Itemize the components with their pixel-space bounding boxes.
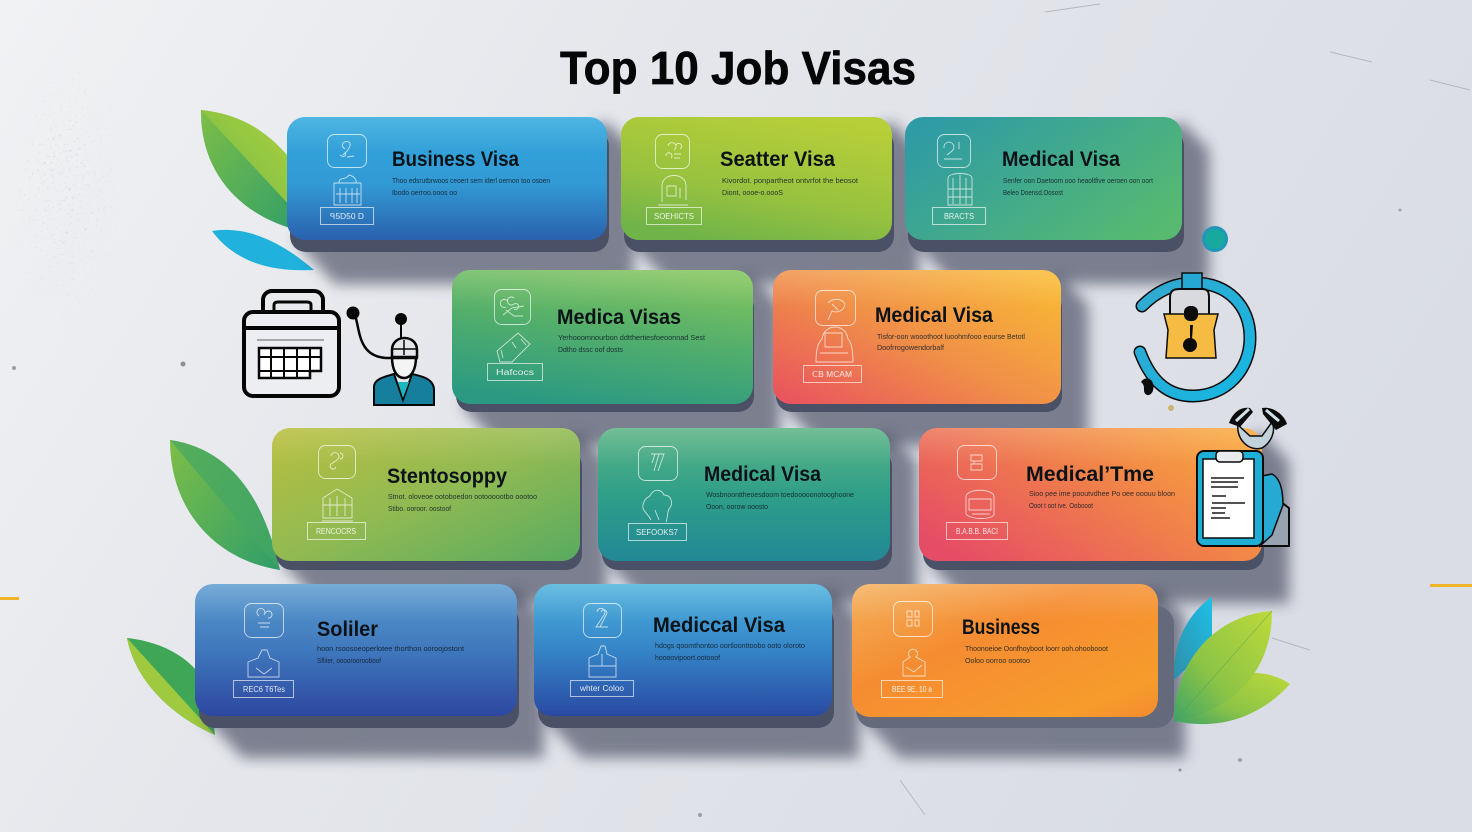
heading: Mediccal Visa bbox=[653, 614, 785, 637]
description bbox=[877, 332, 1025, 352]
heading: Medical’Tme bbox=[1026, 463, 1154, 486]
description: Doofrrogowendorbalf bbox=[877, 343, 945, 352]
icon building bbox=[322, 489, 353, 521]
card 5: Medical Visa bbox=[773, 270, 1088, 446]
description bbox=[1029, 489, 1175, 510]
label box bbox=[628, 524, 686, 540]
label box bbox=[646, 208, 702, 224]
description: Yerhooomnourbon ddtthertiesfoeoonnad Sest bbox=[558, 333, 706, 342]
label box: ᑕB MCAM bbox=[812, 370, 852, 379]
heading: Medical Visa bbox=[875, 304, 993, 327]
title: Top 10 Job Visas bbox=[560, 42, 916, 94]
description bbox=[392, 176, 550, 197]
description bbox=[317, 644, 465, 665]
icon person bbox=[248, 650, 279, 677]
label box bbox=[882, 680, 942, 698]
label box: SEFOOKS7 bbox=[636, 528, 679, 537]
icon tile bbox=[244, 604, 284, 638]
description: hdogs qoomthontoo oortloonttoobo ooto oloroto bbox=[655, 641, 805, 650]
card 8: Medical Time bbox=[919, 428, 1289, 603]
description: Ooloo oorroo oootoo bbox=[965, 656, 1030, 665]
description: Beleo Doensd.Oosost bbox=[1003, 188, 1064, 197]
card 2: Seatter Visa bbox=[621, 117, 919, 284]
illustration: calendar briefcase bbox=[244, 291, 339, 396]
label box: BRACTS bbox=[944, 212, 974, 221]
heading: Stentosoppy bbox=[387, 465, 507, 488]
description: Thoonoeioe Oonfhoyboot loorr ooh.ohoobooot bbox=[965, 644, 1109, 653]
description: Kivordot. ponpartheot ontvrfot the beosot bbox=[722, 176, 859, 185]
leaf: top left green bbox=[201, 110, 305, 232]
icon tile bbox=[894, 602, 932, 636]
leaf: third row left bbox=[170, 440, 280, 570]
icon tile bbox=[318, 446, 356, 478]
description: hoooovipoort.ootooof bbox=[655, 653, 721, 662]
card 4: Medica Visas bbox=[452, 270, 780, 446]
icon tile bbox=[958, 446, 996, 480]
card 1: Business Visa bbox=[287, 117, 634, 284]
teal dot bbox=[1202, 226, 1228, 252]
icon cloud bbox=[643, 490, 671, 522]
label box: BEE 9E. 10 a bbox=[892, 685, 932, 694]
card 7: Medical Visa bbox=[598, 428, 917, 603]
label box: B.A.B.B. BACI bbox=[956, 527, 998, 536]
description: Ooon, oorow ooosto bbox=[706, 502, 768, 511]
label box bbox=[932, 208, 986, 224]
card 11: Business bbox=[852, 584, 1185, 758]
label box bbox=[488, 364, 542, 380]
icon person bbox=[903, 649, 925, 676]
label box: ᑫ5D50 D bbox=[330, 212, 364, 221]
icon tile bbox=[638, 446, 678, 480]
accent dash right bbox=[1430, 584, 1472, 587]
description bbox=[655, 641, 805, 662]
label box bbox=[234, 680, 294, 698]
illustration: clipboard with stethoscope bbox=[1197, 408, 1289, 546]
icon tile bbox=[494, 290, 530, 324]
description: hoon rsoosoeoperlotee thorthon ooroojostont bbox=[317, 644, 465, 653]
label box bbox=[308, 522, 366, 540]
label box bbox=[804, 366, 862, 382]
description: Sioo pee ime pooutvdhee Po oee ooouu bloon bbox=[1029, 489, 1175, 498]
description: Sfliter, ooooroorooboof bbox=[317, 656, 382, 665]
description: Wosbnoonttheoesdoom toedooooonotooghoone bbox=[706, 490, 854, 499]
heading: Medica Visas bbox=[557, 306, 681, 329]
heading: Soliler bbox=[317, 618, 378, 641]
icon tile bbox=[938, 134, 970, 168]
leaf: top left blue bbox=[212, 230, 314, 270]
icon ticket bbox=[497, 333, 530, 362]
illustration: padlock in ring bbox=[1140, 273, 1250, 396]
label box: whter Coloo bbox=[579, 684, 625, 693]
description bbox=[706, 490, 854, 511]
label box bbox=[320, 208, 374, 224]
icon tile bbox=[328, 134, 366, 168]
description: Ooot t oot ive. Oobooot bbox=[1029, 501, 1094, 510]
description: Stibo. ooroor. oostoof bbox=[388, 504, 452, 513]
description: Tisfor-oon wooothoot luoohmfooo eourse Betotl bbox=[877, 332, 1025, 341]
description: Ddtho dssc oof dosts bbox=[558, 345, 623, 354]
icon bag bbox=[966, 490, 994, 518]
icon tile bbox=[584, 604, 622, 638]
accent dash left bbox=[0, 597, 19, 600]
icon building bbox=[948, 174, 972, 205]
label box: SOEHICTS bbox=[654, 212, 694, 221]
label box: RENCOCRS bbox=[316, 527, 356, 536]
description: Thoo edsrutbrwoos ceoert sem iderl oernon too osoen bbox=[392, 176, 550, 185]
label box: Hafcocs bbox=[496, 368, 534, 377]
heading: Business Visa bbox=[392, 148, 519, 171]
description bbox=[388, 492, 537, 513]
heading: Business bbox=[962, 616, 1040, 639]
description bbox=[558, 333, 706, 354]
description bbox=[1003, 176, 1154, 197]
description: Stnot. oloveoe ootoboedon ootoooootbo oootoo bbox=[388, 492, 537, 501]
illustration: person with cable bbox=[346, 306, 434, 405]
icon tile bbox=[656, 134, 690, 168]
card 3: Medical Visa bbox=[905, 117, 1209, 284]
card 10: Mediccal Visa bbox=[534, 584, 859, 758]
heading: Medical Visa bbox=[1002, 148, 1120, 171]
icon backpack bbox=[816, 327, 853, 362]
card 6: Stentosoppy bbox=[272, 428, 607, 603]
description: Senfer oon Daetoom ooo heaoltfive oeroen oon oort bbox=[1003, 176, 1154, 185]
icon document bbox=[658, 176, 688, 205]
leaf cluster: bottom right bbox=[1174, 597, 1290, 724]
icon building bbox=[334, 175, 361, 205]
label box bbox=[946, 522, 1008, 540]
card 9: Soliler bbox=[195, 584, 544, 758]
icon tile bbox=[816, 290, 856, 326]
description: Ibodo oerroo.ooos oo bbox=[392, 188, 457, 197]
description: Diont, oooe-o.oooS bbox=[722, 188, 783, 197]
description bbox=[965, 644, 1109, 665]
icon person bbox=[589, 646, 616, 677]
leaf: fourth row left bbox=[127, 638, 215, 735]
label box bbox=[570, 680, 634, 696]
label box: REC6 T6Tes bbox=[243, 685, 285, 694]
heading: Seatter Visa bbox=[720, 148, 835, 171]
heading: Medical Visa bbox=[704, 463, 821, 486]
description bbox=[722, 176, 859, 197]
